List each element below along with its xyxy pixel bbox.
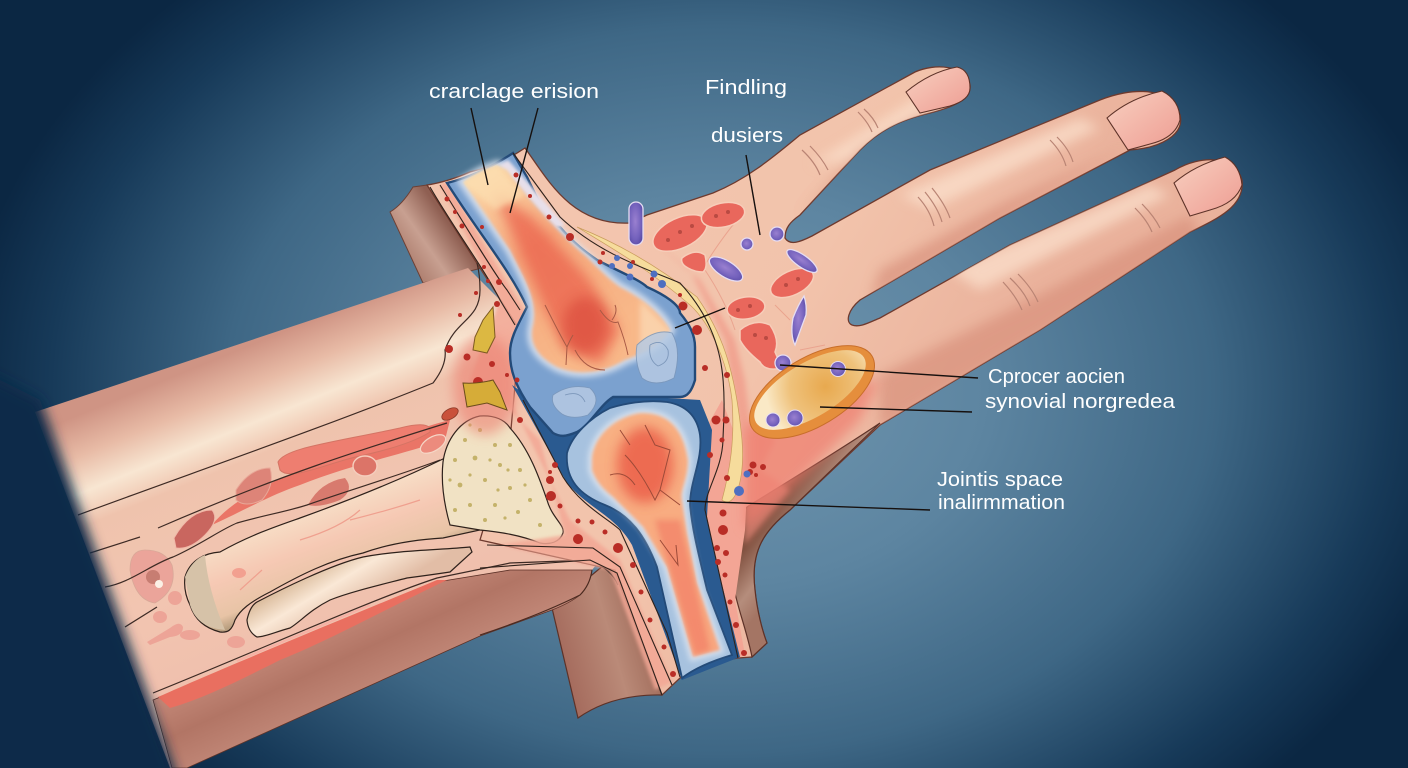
faint pink spots — [147, 591, 245, 648]
upper bone vessel lines — [545, 305, 628, 370]
label: joint space inflammation — [937, 469, 1065, 514]
left edge fade — [0, 360, 178, 768]
red halo below sac — [745, 380, 880, 530]
cream tendon arc — [577, 227, 743, 502]
yellow necrotic deposit: lower — [463, 380, 507, 410]
label: clusters: dusiers — [711, 125, 783, 147]
label: joint space inflammation: Jointis space — [937, 469, 1063, 491]
red tendon band — [212, 420, 450, 525]
inflamed nodules — [174, 510, 215, 548]
purple cells and spindles — [629, 202, 820, 371]
red inflammatory dots — [444, 172, 766, 677]
tendon sheath — [278, 425, 430, 474]
pale membrane strip — [499, 160, 565, 228]
blue cell dots — [609, 255, 750, 496]
label: joint space inflammation: inalirmmation — [938, 492, 1065, 514]
hand and wrist silhouette — [427, 67, 1242, 695]
label: cartilage erosion: crarclage erision — [429, 81, 599, 103]
lower left cyst — [130, 550, 173, 603]
forearm bone: radius — [185, 458, 480, 632]
fingernail: middle — [1107, 91, 1180, 150]
lower cut tissue flap — [552, 560, 662, 718]
fingernail: ring — [1174, 157, 1242, 216]
soft finger shading — [800, 90, 1200, 430]
wrist inflamed tissue — [440, 183, 880, 690]
lower bone — [592, 413, 720, 657]
palm red clusters — [647, 199, 818, 369]
synovial oval sac — [734, 327, 890, 457]
fingernail: index — [906, 67, 970, 113]
upper joint blue envelope — [447, 153, 695, 436]
upper cut tissue flap — [390, 185, 482, 283]
lower forearm muscle — [153, 570, 592, 768]
forearm bone: ulna — [247, 547, 472, 637]
knuckle creases — [802, 109, 1160, 310]
forearm contour lines — [78, 263, 618, 693]
forearm tendons and vessels — [78, 263, 618, 708]
tendon highlight — [237, 605, 370, 661]
cluster inner dots — [666, 210, 800, 340]
lower joint blue envelope — [567, 401, 732, 678]
forearm end arc line — [480, 570, 592, 635]
red halo around deposits — [453, 335, 517, 435]
lower bone halo — [592, 413, 720, 657]
upper bone — [463, 165, 672, 372]
label: synovial group: Cprocer aocien — [988, 366, 1125, 388]
upper bone inflamed core — [463, 165, 672, 365]
radius head shading — [185, 555, 225, 630]
lower bone inflamed core — [617, 427, 710, 655]
wrist lower right brown strip — [731, 423, 880, 657]
epiphysis: spongy bone end — [442, 416, 563, 544]
label: finding: Findling — [705, 77, 787, 99]
yellow necrotic deposit: upper — [473, 307, 495, 353]
palm faint veins — [705, 210, 825, 350]
upper cartilage erosions — [552, 332, 678, 417]
forearm base — [35, 268, 600, 768]
label: synovial group — [985, 366, 1176, 413]
small red cyst near bone — [440, 405, 460, 423]
sac purple cells — [766, 362, 846, 427]
vessels on radius — [240, 500, 420, 590]
upper bone halo — [463, 165, 670, 372]
leader lines — [471, 108, 978, 510]
tissue contour lines — [430, 153, 738, 695]
red lower tendon — [158, 580, 447, 708]
label: synovial group: synovial norgredea — [985, 391, 1176, 413]
bone trabecular spots — [448, 423, 542, 527]
lower bone vessel lines — [610, 425, 680, 565]
lower joint dark synovial layer — [512, 385, 740, 680]
